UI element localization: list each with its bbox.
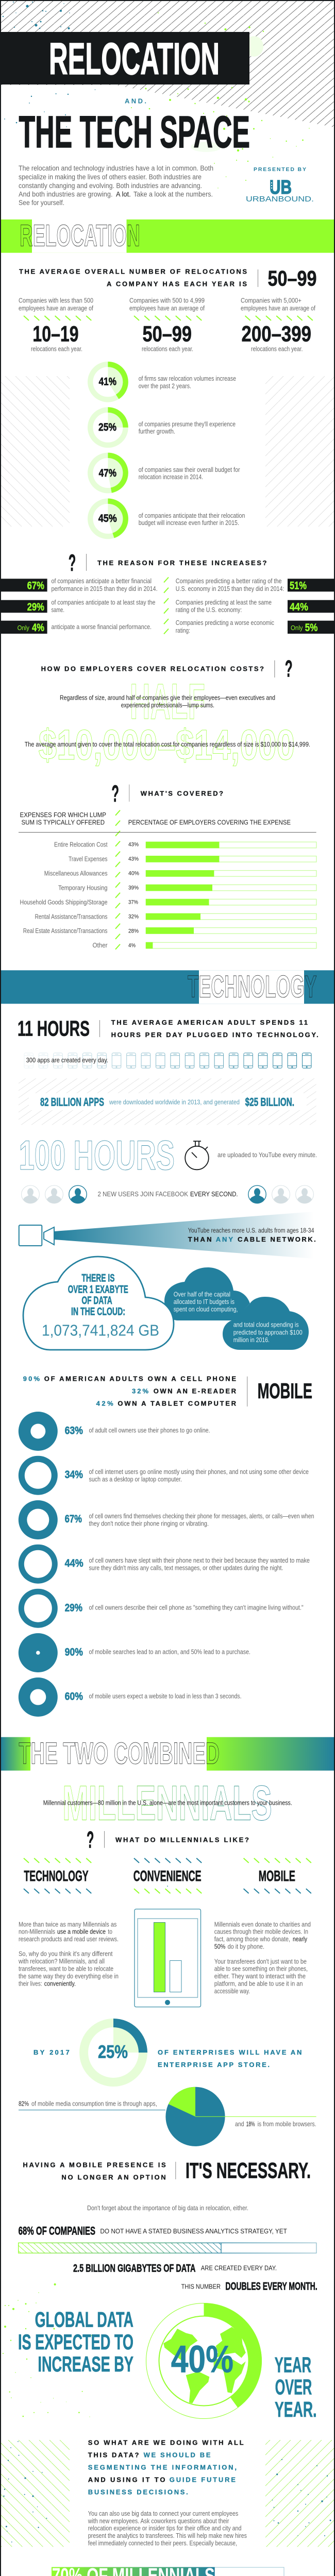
text: enterprise app store: OF ENTERPRISES WILL HAVE AN bbox=[158, 2048, 301, 2056]
bar: other: 4% bbox=[128, 943, 136, 949]
outlined stat: 100 hours: 100 HOURS bbox=[19, 1132, 175, 1179]
text: economy ratings bbox=[176, 578, 284, 634]
text: capital in cloud: allocated to IT budgets is bbox=[174, 1298, 234, 1306]
text: lump sums: Regardless of size, around half of companies give their employees—even executives and bbox=[60, 694, 275, 701]
green slash divider bbox=[164, 577, 169, 634]
text: millennials right column: either. They want to interact with the bbox=[214, 1973, 306, 1980]
text: economy ratings: rating: bbox=[176, 627, 190, 634]
bar: temporary housing: Temporary Housing bbox=[58, 884, 108, 891]
donut: 47%: 47% bbox=[99, 467, 116, 479]
text: 300 apps: 300 apps are created every day. bbox=[26, 1057, 108, 1064]
green hatch panel right bbox=[265, 2440, 334, 2547]
column: small companies: Companies with less than 500 bbox=[19, 297, 93, 304]
heading: what do millennials like bbox=[87, 1827, 249, 1853]
heading: how employers cover costs: HOW DO EMPLOYERS COVER RELOCATION COSTS? bbox=[41, 665, 264, 673]
text: economy ratings: Companies predicting at least the same bbox=[176, 599, 272, 606]
column: large companies: Companies with 5,000+ bbox=[241, 297, 301, 304]
presented by logo bbox=[246, 166, 314, 204]
donut: 45%: 45% bbox=[98, 513, 117, 524]
stat: 2.5 billion gigabytes: THIS NUMBER bbox=[181, 2283, 221, 2290]
text: year over year: YEAR bbox=[275, 2352, 311, 2377]
stat row: 60% bbox=[19, 1677, 242, 1717]
donut: 25%: 25% bbox=[98, 421, 116, 433]
text: enterprise app store: BY 2017 bbox=[34, 2048, 70, 2056]
text: financial performance: performance in 2015 than they did in 2014. bbox=[52, 585, 158, 592]
text: millennials left column: conveniently. bbox=[44, 1980, 76, 1987]
stat row: 44%: of cell owners have slept with their phone next to their bed because they wanted to make bbox=[89, 1557, 310, 1564]
heading: what's covered bbox=[111, 781, 223, 807]
text: browsers share: and bbox=[235, 2121, 244, 2128]
text: millennials right column: platform, and be able to use it in an bbox=[214, 1980, 303, 1988]
heading: how employers cover costs bbox=[41, 655, 293, 682]
text: millennials left column: the same way they do everything else in bbox=[19, 1973, 119, 1980]
bar: other: Other bbox=[93, 942, 107, 949]
column heading: technology bbox=[24, 1858, 91, 1893]
text: what are we doing with data: SEGMENTING THE INFORMATION, bbox=[88, 2464, 237, 2471]
column: mid companies: relocations each year. bbox=[142, 346, 193, 353]
intro text block: See for yourself. bbox=[19, 199, 64, 207]
column: large companies: relocations each year. bbox=[251, 346, 303, 353]
text: global data headline: INCREASE BY bbox=[38, 2352, 133, 2376]
text: millennials left column: to bbox=[108, 1928, 112, 1936]
text: youtube reach: THAN bbox=[188, 1235, 211, 1243]
intro text block: A lot. bbox=[116, 191, 131, 198]
text: lump sums: experienced professionals—lump sums. bbox=[121, 702, 214, 709]
intro text block bbox=[19, 164, 213, 207]
text: financial performance bbox=[52, 578, 158, 631]
stat: 68% of companies bbox=[19, 2224, 287, 2237]
heading: what do millennials like: ? bbox=[87, 1827, 94, 1853]
stat: 2.5 billion gigabytes: 2.5 BILLION GIGABYTES OF DATA bbox=[73, 2262, 195, 2274]
text: millennials right column: causes through their mobile devices. In bbox=[214, 1928, 308, 1936]
text: millennials right column: able to see something on their phones, bbox=[214, 1965, 308, 1973]
text: apps share: of mobile media consumption time is through apps, bbox=[31, 2100, 157, 2108]
heading: what do millennials like: WHAT DO MILLENNIALS LIKE? bbox=[115, 1836, 249, 1844]
text: apps share: 82% bbox=[19, 2100, 29, 2108]
text: financial performance: anticipate a worse financial performance. bbox=[52, 623, 152, 631]
text: big data intro: Don't forget about the importance of big data in relocation, either. bbox=[87, 2205, 248, 2212]
stat: device ownership: 90% bbox=[23, 1375, 40, 1382]
stat row: 29%: 29% bbox=[65, 1602, 82, 1614]
outlined cloud: exabyte: THERE IS bbox=[81, 1273, 115, 1284]
text: browsers share: is from mobile browsers. bbox=[258, 2121, 316, 2128]
text: millennials left column bbox=[18, 1921, 119, 1987]
stat: device ownership: OWN AN E-READER bbox=[154, 1387, 237, 1395]
text: millennials left column: their lives: bbox=[19, 1980, 42, 1987]
column heading: convenience: CONVENIENCE bbox=[133, 1868, 202, 1885]
section band: the two combined: THE TWO COMBINED bbox=[19, 1736, 220, 1770]
stat: average overall relocations: THE AVERAGE OVERALL NUMBER OF RELOCATIONS bbox=[19, 268, 247, 276]
bar: entire relocation cost: 43% bbox=[128, 842, 139, 848]
stat row: 34%: such as a desktop or laptop computer. bbox=[89, 1476, 182, 1483]
panel: right percentage bars bbox=[288, 579, 334, 634]
heading: reason for increases: THE REASON FOR THESE INCREASES? bbox=[97, 559, 267, 567]
text: global data headline bbox=[18, 2308, 133, 2376]
heading: reason for increases bbox=[69, 550, 267, 576]
text: millennials left column: with relocation? Millennials, and all bbox=[18, 1958, 105, 1965]
text: connect employees: relocation experience or insider tips for their office and city and bbox=[88, 2525, 242, 2532]
progress bar: 68% bbox=[18, 2243, 316, 2253]
stat row: 67% bbox=[19, 1500, 314, 1539]
text: 45% bbox=[139, 512, 245, 527]
column heading: mobile bbox=[244, 1858, 311, 1893]
outlined cloud: exabyte: OVER 1 EXABYTE bbox=[68, 1283, 128, 1295]
column: large companies bbox=[241, 297, 315, 353]
text: millennials left column: More than twice as many Millennials as bbox=[19, 1921, 116, 1928]
outlined cloud: exabyte: 1,073,741,824 GB bbox=[42, 1321, 159, 1339]
outlined cloud: exabyte bbox=[23, 1257, 174, 1350]
text: economy ratings: Companies predicting a better rating of the bbox=[176, 578, 282, 585]
section band: technology bbox=[1, 970, 334, 1004]
stat: average overall relocations bbox=[19, 266, 316, 291]
column: mid companies bbox=[129, 297, 205, 353]
bar: real estate assistance: Real Estate Assistance/Transactions bbox=[23, 927, 107, 935]
bar: miscellaneous allowances: Miscellaneous Allowances bbox=[44, 870, 107, 877]
donut: 41%: 41% bbox=[99, 376, 116, 387]
title connector: and: AND. bbox=[125, 97, 146, 105]
teal splatter panels bbox=[3, 2441, 331, 2543]
stat: average overall relocations: A COMPANY HAS EACH YEAR IS bbox=[107, 280, 247, 288]
text: capital in cloud: Over half of the capital bbox=[174, 1291, 230, 1298]
text: what are we doing with data: SO WHAT ARE WE DOING WITH ALL bbox=[88, 2439, 244, 2447]
text: uploaded to YouTube: are uploaded to YouTube every minute. bbox=[217, 1151, 317, 1159]
icon row: phones bbox=[24, 1053, 311, 1068]
text: 25%: further growth. bbox=[139, 428, 175, 435]
intro text block: Take a look at the numbers. bbox=[133, 191, 213, 198]
bar: miscellaneous allowances bbox=[44, 870, 316, 877]
panel: left percentage bars: 4% bbox=[32, 621, 44, 634]
bar chart: expenses covered bbox=[20, 841, 316, 949]
text: 45%: of companies anticipate that their relocation bbox=[139, 512, 245, 519]
green slash column bbox=[115, 810, 120, 950]
text: youtube reach: CABLE NETWORK. bbox=[238, 1235, 316, 1243]
text: facebook users bbox=[98, 1191, 238, 1198]
filled clouds bbox=[164, 1267, 309, 1350]
text: facebook users: EVERY SECOND. bbox=[190, 1191, 238, 1198]
text: what are we doing with data: GUIDE FUTURE bbox=[170, 2476, 236, 2484]
text: year over year: OVER bbox=[275, 2375, 312, 2399]
icon row: facebook users bbox=[22, 1185, 313, 1204]
text: 47%: of companies saw their overall budget for bbox=[139, 466, 240, 473]
column: small companies bbox=[19, 297, 93, 353]
text: year over year bbox=[275, 2352, 316, 2421]
stat row: 63%: of adult cell owners use their phones to go online. bbox=[89, 1427, 210, 1434]
text: economy ratings: Companies predicting a worse economic bbox=[176, 619, 274, 626]
bar: household goods: Household Goods Shipping/Storage bbox=[20, 899, 108, 906]
text: 47% bbox=[139, 466, 240, 481]
bar: miscellaneous allowances: 40% bbox=[128, 871, 139, 877]
bar: temporary housing: 39% bbox=[128, 885, 139, 891]
heading: reason for increases: ? bbox=[69, 550, 76, 576]
stat row: 90%: 90% bbox=[65, 1646, 83, 1658]
text: economy ratings: rating of the U.S. economy: bbox=[176, 606, 242, 614]
chart headers: PERCENTAGE OF EMPLOYERS COVERING THE EXPENSE bbox=[128, 819, 291, 826]
panel: right percentage bars: 44% bbox=[290, 601, 308, 613]
bar: travel expenses bbox=[69, 855, 316, 862]
text: connect employees: with new employees. Ask coworkers questions about their bbox=[88, 2517, 229, 2524]
donut: 25% of enterprises: 25% bbox=[98, 2042, 128, 2062]
icon: stopwatch bbox=[185, 1141, 209, 1170]
text: millennials left column: research products and read user reviews. bbox=[19, 1936, 119, 1943]
text: enterprise app store: ENTERPRISE APP STORE. bbox=[158, 2061, 270, 2069]
stat: 2.5 billion gigabytes bbox=[73, 2262, 317, 2292]
text: millennials left column: transferees, want to be able to relocate bbox=[19, 1965, 113, 1972]
bar: rental assistance: 32% bbox=[128, 914, 139, 920]
stat: 68% of companies: DO NOT HAVE A STATED BUSINESS ANALYTICS STRATEGY, YET bbox=[100, 2227, 287, 2235]
panel: right percentage bars: Only bbox=[291, 624, 303, 632]
heading: how employers cover costs: ? bbox=[285, 655, 293, 682]
text: millennials left column: non-Millennials bbox=[19, 1928, 55, 1936]
column: large companies: employees have an average of bbox=[241, 305, 315, 312]
text: capital in cloud: million in 2016. bbox=[233, 1336, 270, 1344]
green hatch panel left bbox=[1, 2440, 70, 2547]
text: millennials left column: use a mobile device bbox=[57, 1928, 106, 1936]
column: mid companies: 50–99 bbox=[142, 322, 192, 347]
bar: entire relocation cost bbox=[54, 841, 316, 848]
column heading: convenience bbox=[133, 1858, 202, 1893]
text: global data headline: GLOBAL DATA bbox=[35, 2308, 133, 2332]
stat: device ownership: OF AMERICAN ADULTS OWN A CELL PHONE bbox=[44, 1375, 236, 1382]
text: financial performance: of companies anticipate a better financial bbox=[52, 578, 152, 585]
intro text block: specialize in making the lives of others easier. Both industries are bbox=[19, 173, 202, 181]
stat: average overall relocations: 50–99 bbox=[268, 266, 316, 291]
stat: 11 hours: 11 HOURS bbox=[18, 1016, 90, 1041]
chart headers bbox=[19, 811, 316, 833]
text: global data headline: IS EXPECTED TO bbox=[18, 2330, 133, 2354]
text: facebook users: 2 NEW USERS JOIN FACEBOOK bbox=[98, 1191, 189, 1198]
bar: travel expenses: 43% bbox=[128, 856, 139, 862]
heading: what's covered: ? bbox=[111, 781, 119, 807]
text: connect employees: You can also use big data to connect your current employees bbox=[88, 2510, 238, 2517]
green splatter: global data bbox=[3, 2283, 92, 2417]
donut: 25% of enterprises bbox=[83, 2019, 147, 2082]
stat: it's necessary: HAVING A MOBILE PRESENCE IS bbox=[23, 2161, 166, 2169]
stat row: 60%: of mobile users expect a website to load in less than 3 seconds. bbox=[89, 1693, 241, 1700]
chart headers: EXPENSES FOR WHICH LUMP bbox=[20, 811, 106, 819]
stat: 2.5 billion gigabytes: ARE CREATED EVERY DAY. bbox=[201, 2265, 277, 2272]
panel: left percentage bars: 29% bbox=[27, 601, 44, 613]
chart headers: SUM IS TYPICALLY OFFERED bbox=[22, 819, 105, 826]
icon: projector beam bbox=[19, 1212, 314, 1259]
text: capital in cloud: and total cloud spending is bbox=[233, 1321, 299, 1329]
presented by logo: UB bbox=[270, 177, 292, 198]
stat: device ownership bbox=[23, 1375, 312, 1407]
panel: left percentage bars bbox=[1, 579, 47, 634]
panel: 82 billion apps: were downloaded worldwide in 2013, and generated bbox=[109, 1098, 240, 1106]
text: 47%: relocation increase in 2014. bbox=[139, 473, 203, 481]
stat: it's necessary bbox=[23, 2159, 311, 2183]
title bar: relocation: RELOCATION bbox=[49, 34, 220, 84]
text: youtube reach bbox=[188, 1227, 316, 1243]
text: capital in cloud: spent on cloud computing, bbox=[174, 1306, 238, 1313]
column: small companies: employees have an average of bbox=[19, 305, 93, 312]
stat row: 63%: 63% bbox=[65, 1425, 83, 1436]
bar: entire relocation cost: Entire Relocation Cost bbox=[54, 841, 108, 848]
donut: 45% bbox=[90, 498, 128, 538]
text: youtube reach: ANY bbox=[216, 1235, 233, 1243]
heading: what's covered: WHAT'S COVERED? bbox=[141, 790, 223, 798]
stat row: 34% bbox=[19, 1456, 309, 1495]
icon: globe with 40% ring bbox=[146, 2303, 262, 2418]
panel: left percentage bars: Only bbox=[18, 624, 30, 632]
green paint splatter bbox=[131, 12, 310, 189]
header hatch pattern bbox=[1, 1, 334, 127]
stat row: 29% bbox=[19, 1589, 304, 1628]
icon: globe with 40% ring: 40% bbox=[171, 2337, 233, 2380]
text: financial performance: same. bbox=[52, 606, 64, 614]
bar: household goods bbox=[20, 899, 316, 906]
panel: 82 billion apps: 82 BILLION APPS bbox=[40, 1096, 104, 1109]
stat row: 29%: of cell owners describe their cell phone as "something they can't imagine living without." bbox=[89, 1604, 304, 1612]
stat row: 44%: sure they didn't miss any calls, text messages, or other updates during the night. bbox=[89, 1564, 283, 1571]
panel: 82 billion apps bbox=[19, 1078, 316, 1125]
panel: right percentage bars: 5% bbox=[305, 621, 317, 634]
donut: 47% bbox=[90, 453, 128, 493]
text: what are we doing with data: BUSINESS DECISIONS. bbox=[88, 2488, 188, 2496]
pie chart: apps vs browsers bbox=[19, 2087, 316, 2146]
donut: 41% bbox=[90, 362, 128, 400]
presented by logo: PRESENTED BY bbox=[254, 166, 306, 173]
text: millennials right column: Your transferees don't just want to be bbox=[214, 1958, 307, 1965]
title bar: relocation bbox=[1, 32, 249, 84]
text: what are we doing with data: AND USING IT TO bbox=[88, 2476, 165, 2484]
section band: relocation: RELOCATION bbox=[20, 219, 140, 253]
panel: right percentage bars: 51% bbox=[290, 579, 307, 591]
text: 41%: over the past 2 years. bbox=[139, 382, 191, 389]
bar: other bbox=[93, 942, 316, 949]
text: what are we doing with data: WE SHOULD BE bbox=[144, 2451, 211, 2459]
panel: 82 billion apps: $25 BILLION. bbox=[245, 1096, 294, 1109]
text: connect employees bbox=[88, 2510, 247, 2547]
stat: device ownership: 32% bbox=[132, 1387, 148, 1395]
text: millennials right column: fact, among those who donate, bbox=[214, 1936, 290, 1943]
text: millennials right column: Millennials even donate to charities and bbox=[214, 1921, 311, 1928]
presented by logo: URBANBOUND. bbox=[246, 195, 314, 204]
stat row: 34%: 34% bbox=[65, 1469, 83, 1481]
section band: relocation bbox=[1, 219, 334, 253]
text: browsers share bbox=[235, 2121, 316, 2128]
column heading: mobile: MOBILE bbox=[259, 1868, 295, 1885]
text: financial performance: of companies anticipate to at least stay the bbox=[52, 599, 155, 606]
text: millennials right column: nearly bbox=[293, 1936, 308, 1943]
outlined cloud: exabyte: IN THE CLOUD: bbox=[71, 1306, 125, 1318]
column: mid companies: employees have an average of bbox=[129, 305, 205, 312]
text: millennials right column: 50% bbox=[214, 1943, 225, 1951]
teal paint splatter bbox=[3, 2, 116, 127]
column: large companies: 200–399 bbox=[241, 322, 311, 347]
icon: tablet bar chart bbox=[135, 1909, 201, 2007]
text: millennials right column bbox=[214, 1921, 311, 1995]
text: 41%: of firms saw relocation volumes increase bbox=[139, 375, 236, 382]
column heading: technology: TECHNOLOGY bbox=[24, 1868, 89, 1885]
text: millennials right column: do it by phone. bbox=[228, 1943, 264, 1951]
stat: 68% of companies: 68% OF COMPANIES bbox=[19, 2224, 95, 2237]
text: 45%: budget will increase even further in 2015. bbox=[139, 519, 239, 527]
bar: rental assistance bbox=[35, 913, 316, 920]
stat: 11 hours bbox=[18, 1016, 319, 1041]
stat row: 63% bbox=[19, 1412, 210, 1451]
donut: 25% bbox=[90, 407, 128, 445]
column: mid companies: Companies with 500 to 4,999 bbox=[129, 297, 205, 304]
text: capital in cloud bbox=[174, 1291, 303, 1344]
bar: real estate assistance bbox=[23, 927, 316, 935]
text: connect employees: feel immediately connected to their peers. Especially because, bbox=[88, 2539, 237, 2547]
stat: 11 hours: HOURS PER DAY PLUGGED INTO TECHNOLOGY. bbox=[111, 1031, 319, 1039]
stat row: 67%: they don't notice their phone ringing or vibrating. bbox=[89, 1520, 209, 1528]
text: 25%: of companies presume they'll experience bbox=[139, 421, 236, 428]
bar: household goods: 37% bbox=[128, 900, 138, 906]
outlined cloud: exabyte: OF DATA bbox=[81, 1295, 112, 1307]
stat: 11 hours: THE AVERAGE AMERICAN ADULT SPENDS 11 bbox=[111, 1019, 308, 1026]
outlined word: half: HALF bbox=[130, 673, 205, 730]
text: youtube reach: YouTube reaches more U.S. adults from ages 18-34 bbox=[188, 1227, 314, 1234]
text: millennials left column: So, why do you think it's any different bbox=[19, 1951, 113, 1958]
bar: temporary housing bbox=[58, 884, 316, 891]
stat: it's necessary: NO LONGER AN OPTION bbox=[61, 2174, 166, 2181]
text: economy ratings: U.S. economy in 2015 than they did in 2014: bbox=[176, 585, 284, 592]
text: millennial customers: Millennial customers—80 million in the U.S. alone—are the most important customers to your business. bbox=[43, 1800, 292, 1807]
text: capital in cloud: predicted to approach $100 bbox=[233, 1329, 303, 1336]
bar: real estate assistance: 28% bbox=[128, 928, 139, 935]
panel: left percentage bars: 67% bbox=[27, 579, 44, 591]
text: browsers share: 18% bbox=[246, 2121, 255, 2128]
column: small companies: 10–19 bbox=[32, 322, 79, 347]
text: millennials right column: accessible way. bbox=[214, 1988, 250, 1995]
intro text block: constantly changing and evolving. Both industries are advancing. bbox=[19, 182, 202, 190]
text: lump sums bbox=[60, 694, 275, 709]
intro text block: And both industries are growing. bbox=[19, 191, 112, 198]
text: connect employees: present the analytics to transferees. This will help make new hires bbox=[88, 2532, 247, 2539]
stat row: 90%: of mobile searches lead to an action, and 50% lead to a purchase. bbox=[89, 1649, 250, 1656]
text: 41% bbox=[139, 375, 236, 389]
stat row: 44%: 44% bbox=[65, 1557, 83, 1569]
text: what are we doing with data bbox=[88, 2439, 244, 2496]
stat row: 60%: 60% bbox=[65, 1690, 83, 1702]
stat: device ownership: 42% bbox=[96, 1399, 113, 1407]
column: small companies: relocations each year. bbox=[31, 346, 82, 353]
stat row: 67%: 67% bbox=[65, 1513, 82, 1525]
bar: travel expenses: Travel Expenses bbox=[69, 855, 107, 862]
stat row: 44% bbox=[19, 1545, 310, 1584]
text: enterprise app store bbox=[34, 2048, 301, 2069]
intro text block: The relocation and technology industries have a lot in common. Both bbox=[19, 164, 213, 172]
text: what are we doing with data: THIS DATA? bbox=[88, 2451, 139, 2459]
stat row: 90% bbox=[19, 1633, 250, 1672]
stat: device ownership: OWN A TABLET COMPUTER bbox=[118, 1399, 237, 1407]
text: 25% bbox=[139, 421, 236, 435]
bar: rental assistance: Rental Assistance/Transactions bbox=[35, 913, 107, 920]
